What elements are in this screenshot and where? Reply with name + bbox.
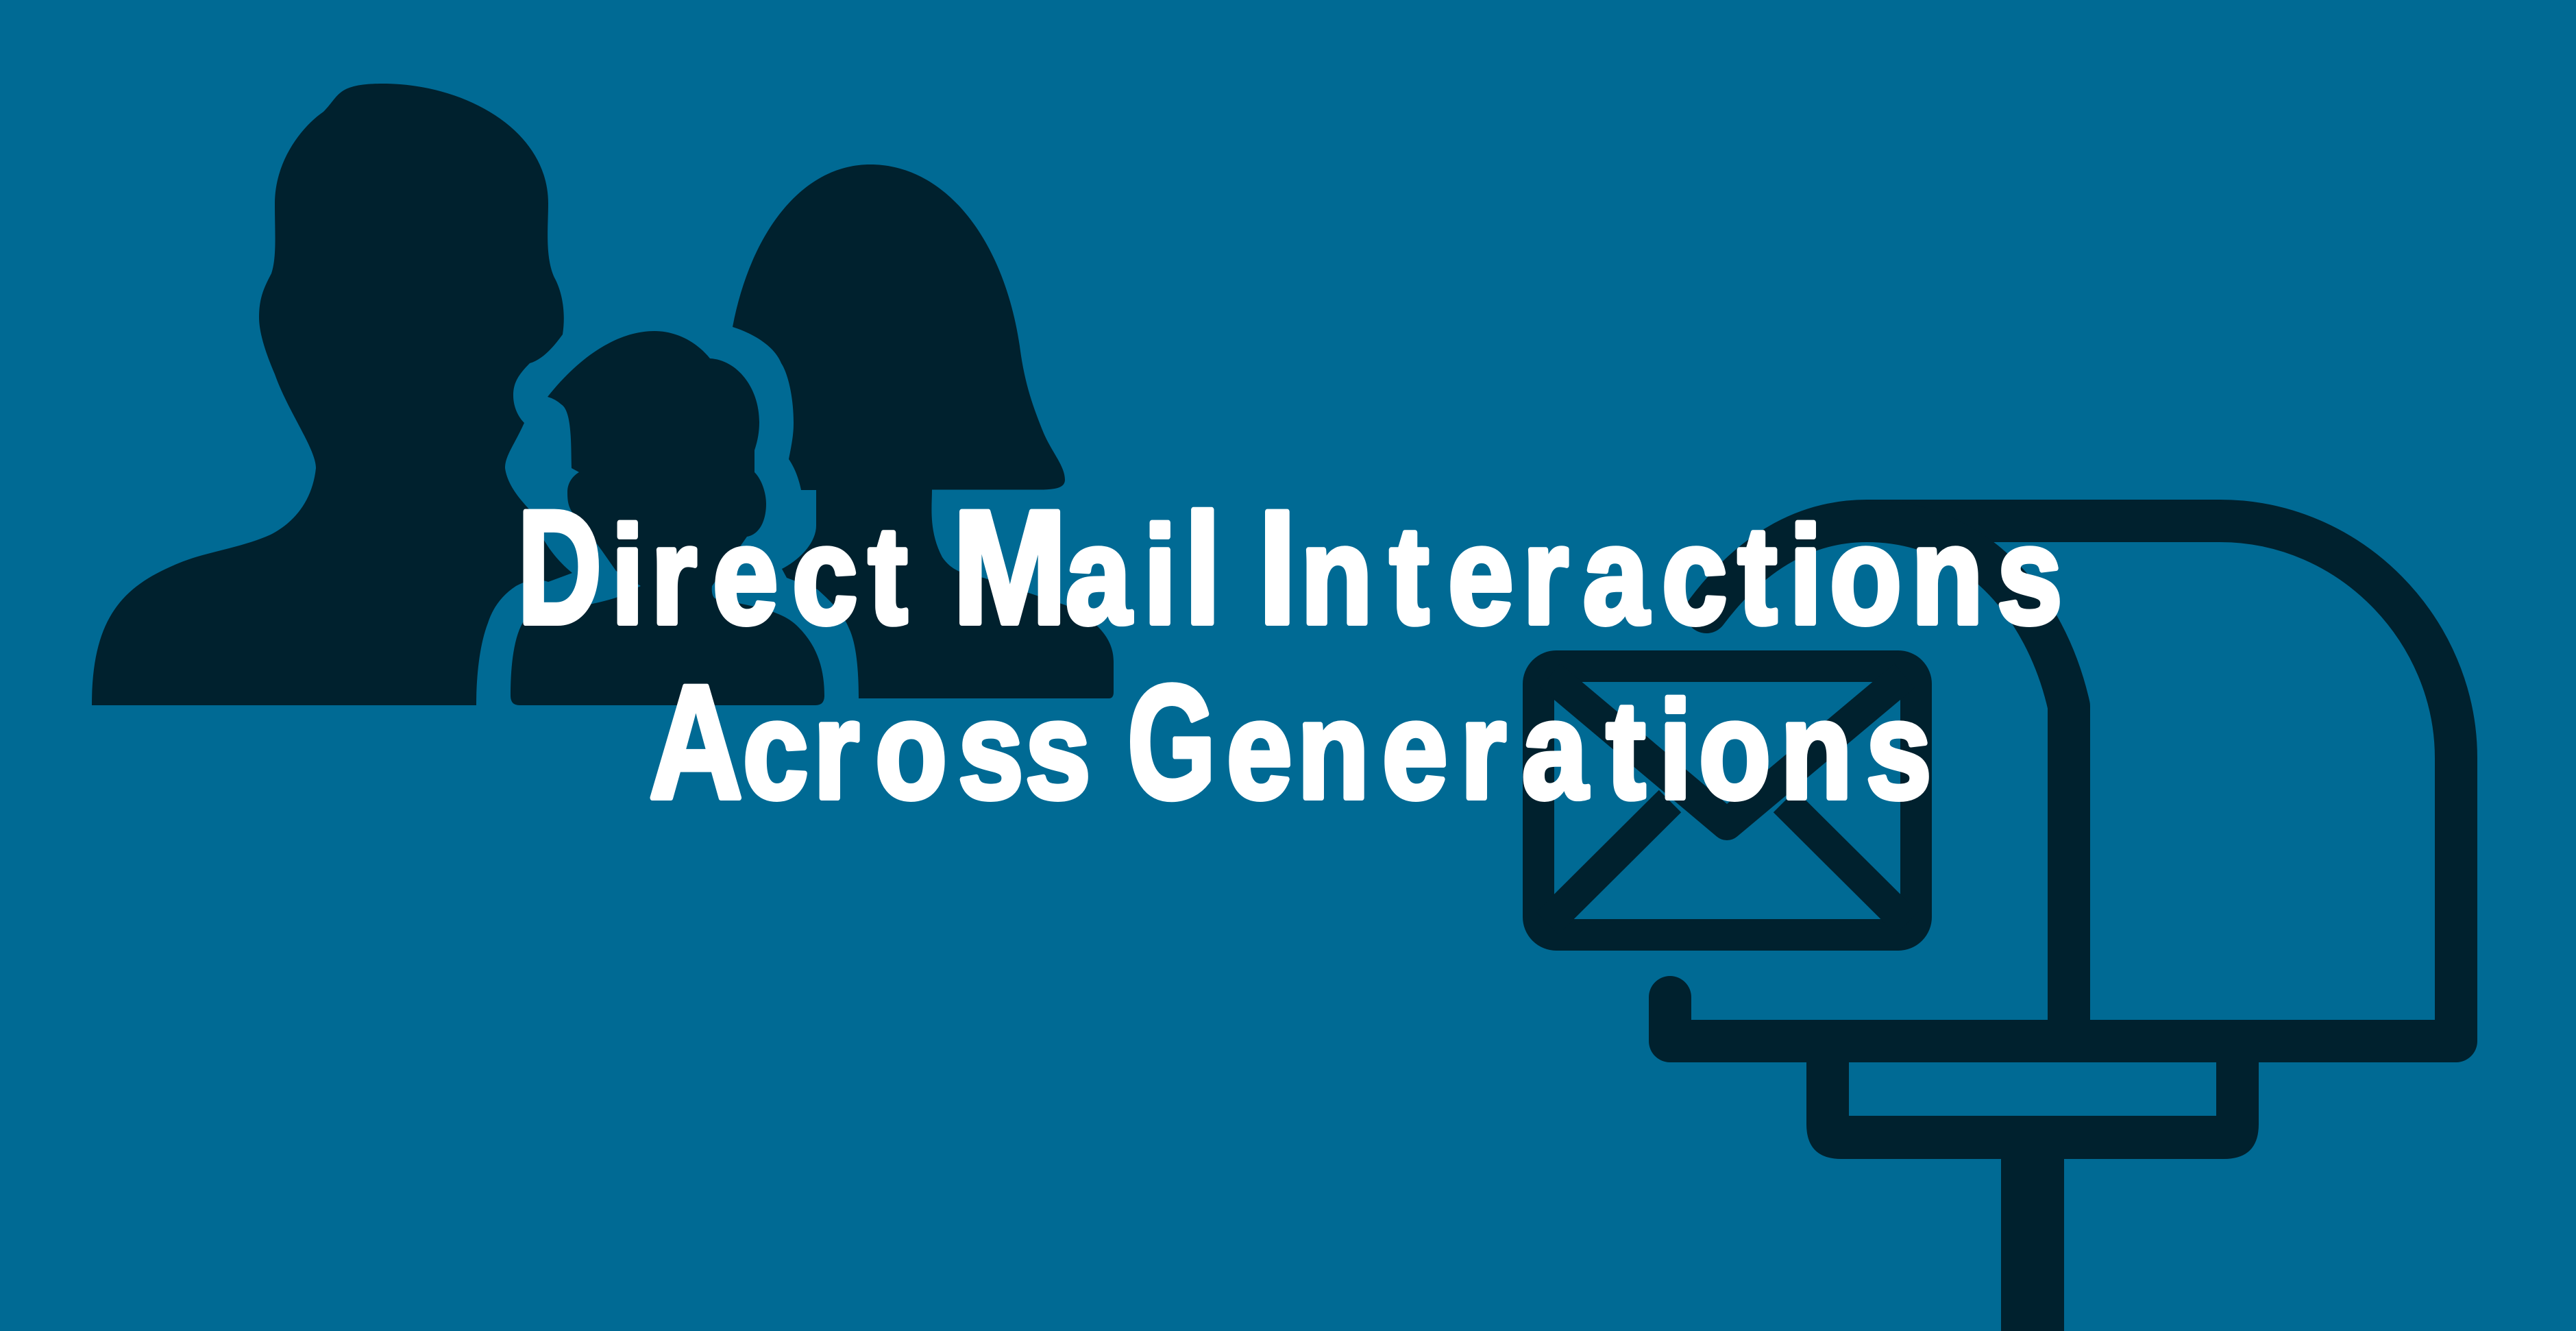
title line 1: I [1258, 478, 1297, 658]
title line 1: D [517, 478, 602, 658]
mailbox door wall [1867, 521, 2069, 1041]
envelope flap [1550, 676, 1904, 825]
mailbox body outline [1670, 521, 2456, 1041]
icon: man silhouette [92, 84, 572, 705]
envelope lower left fold [1547, 801, 1670, 923]
icon: mailbox [1670, 521, 2456, 1331]
title line 1: nteractions [1301, 498, 2062, 652]
mailbox bracket [1806, 1055, 2259, 1159]
title line 2: A [649, 652, 743, 833]
title line 1: l [1184, 481, 1221, 656]
title line 1: irect [611, 498, 907, 652]
mailbox post [2001, 1151, 2064, 1331]
title line 1: M [953, 478, 1067, 658]
title line 2: G [1127, 652, 1216, 833]
icon: envelope [1538, 666, 1916, 935]
icon: woman silhouette [733, 164, 1114, 698]
title line 1: ai [1066, 498, 1177, 652]
title line 2: cross [743, 672, 1090, 827]
envelope frame [1538, 666, 1916, 935]
envelope lower right fold [1784, 801, 1907, 923]
icon: family silhouettes [92, 84, 1114, 705]
title line 2: enerations [1227, 672, 1931, 827]
icon: child silhouette [511, 331, 824, 705]
title [517, 478, 2062, 833]
